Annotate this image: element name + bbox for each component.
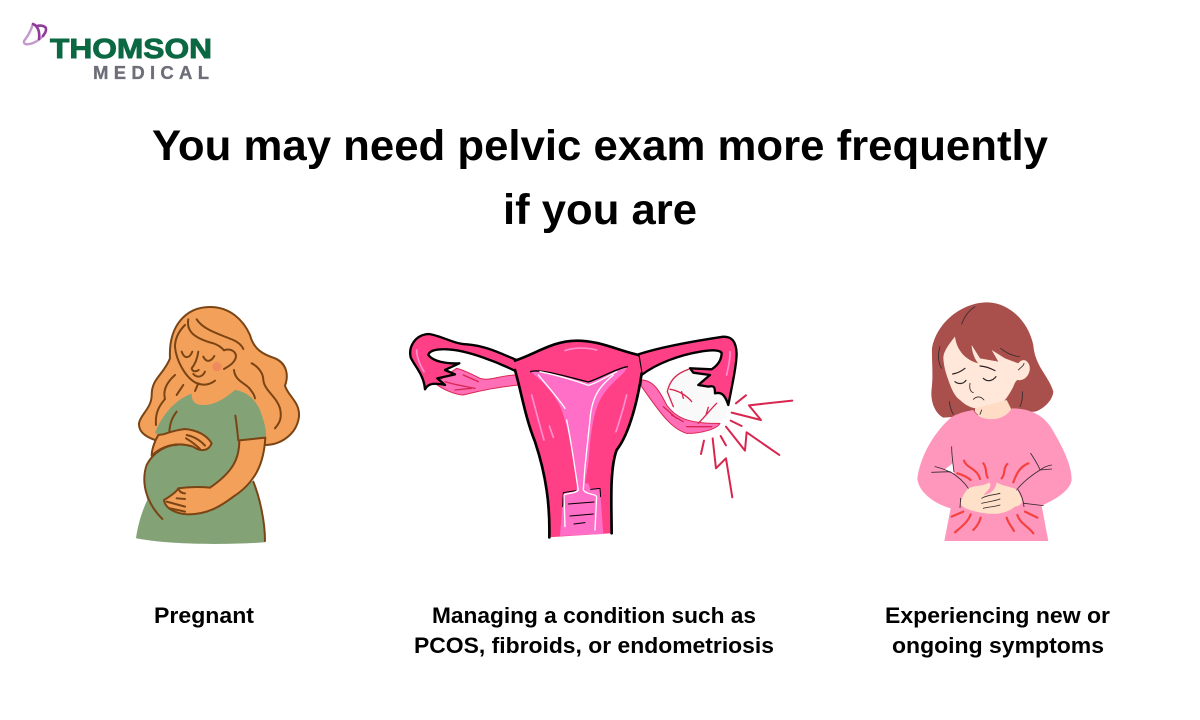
red pain lines (952, 461, 1037, 533)
eyes and brows (953, 366, 996, 384)
title: if you are (503, 186, 697, 234)
arms and hands (164, 438, 265, 514)
label: managing a condition: Managing a condition such as (432, 603, 756, 628)
title (152, 122, 1048, 234)
right tube (642, 380, 720, 433)
hair (931, 302, 1053, 418)
pain bolts (701, 395, 792, 497)
logo wordmark: THOMSON (50, 33, 212, 64)
right arm (638, 337, 737, 405)
face (943, 337, 1030, 408)
cervix lines (568, 502, 594, 524)
label: experiencing symptoms: ongoing symptoms (892, 633, 1104, 658)
icon: butterfly (24, 24, 46, 44)
uterus body (515, 341, 642, 537)
icon: pregnant woman (136, 307, 299, 544)
sweater (917, 408, 1072, 541)
label: experiencing symptoms: Experiencing new or (885, 603, 1110, 628)
label: managing a condition (414, 603, 774, 658)
face edge (175, 325, 215, 385)
soft highlights (417, 348, 730, 440)
hair waves (234, 370, 255, 398)
label: experiencing symptoms (885, 603, 1110, 658)
body outline (515, 341, 642, 537)
hair (139, 307, 299, 445)
hands (961, 482, 1022, 514)
label: pregnant: Pregnant (154, 603, 255, 628)
uterine cavity (531, 367, 627, 484)
dress (136, 390, 266, 544)
left arm (410, 334, 517, 389)
cervix (560, 483, 603, 536)
title: You may need pelvic exam more frequently (152, 122, 1048, 170)
label: managing a condition: PCOS, fibroids, or endometriosis (414, 633, 774, 658)
icon: woman with stomach pain (917, 302, 1072, 541)
left tube (435, 368, 518, 395)
icon: uterus with ovary pain (410, 334, 792, 537)
cheek (212, 362, 222, 371)
ovary veins (445, 369, 717, 427)
line details (932, 307, 1052, 508)
logo subtitle: MEDICAL (93, 62, 209, 83)
white gap (944, 463, 954, 473)
ovary (665, 368, 728, 424)
hairline and ear (188, 319, 236, 369)
eyes, nose, mouth (182, 352, 214, 361)
logo: Thomson Medical (24, 24, 212, 83)
white highlights (538, 372, 617, 530)
line details (144, 319, 281, 541)
neck (975, 400, 1012, 420)
